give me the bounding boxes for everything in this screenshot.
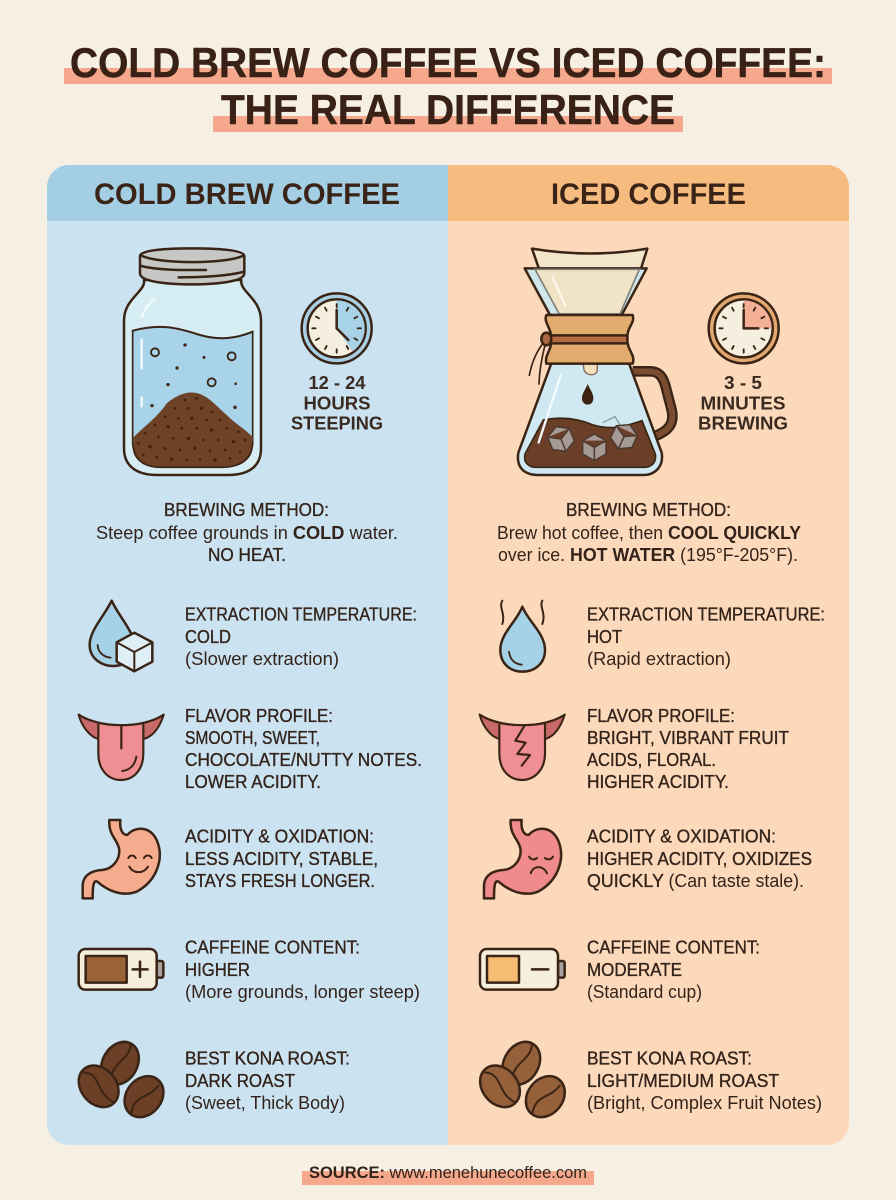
text: caffeine content: MODERATE — [587, 959, 682, 980]
text: caffeine content — [587, 936, 760, 1002]
text: caffeine content: HIGHER — [185, 959, 250, 980]
heading: cold brew coffee — [47, 165, 448, 221]
text: caffeine content: CAFFEINE CONTENT: — [185, 936, 360, 958]
text: best kona roast: BEST KONA ROAST: — [185, 1048, 350, 1068]
text: extraction temperature — [185, 604, 417, 669]
text: brewing method: Steep coffee grounds in COLD water. — [96, 522, 398, 543]
text: 12 to 24 hours steeping: 12 - 24 — [308, 372, 366, 393]
icon: clock 3 to 5 minutes — [709, 293, 779, 363]
text: extraction temperature — [587, 604, 825, 669]
text: 3 to 5 minutes brewing: 3 - 5 — [724, 372, 762, 393]
icon: hot water drop — [500, 601, 545, 672]
text: extraction temperature: EXTRACTION TEMPERATURE: — [185, 604, 417, 624]
text: best kona roast: LIGHT/MEDIUM ROAST — [587, 1070, 779, 1091]
text: extraction temperature: (Slower extraction) — [185, 648, 339, 669]
text: flavor profile: CHOCOLATE/NUTTY NOTES. — [185, 749, 422, 770]
icon: upset stomach — [484, 820, 561, 898]
text: flavor profile: SMOOTH, SWEET, — [185, 727, 320, 748]
text: best kona roast: BEST KONA ROAST: — [587, 1048, 752, 1068]
text: best kona roast — [185, 1048, 350, 1113]
text: flavor profile: FLAVOR PROFILE: — [587, 705, 735, 726]
text: flavor profile: BRIGHT, VIBRANT FRUIT — [587, 727, 789, 748]
icon: battery high — [79, 949, 163, 990]
icon: medium coffee beans — [472, 1035, 573, 1125]
icon: happy stomach — [83, 820, 160, 898]
title: THE REAL DIFFERENCE — [221, 86, 675, 133]
text: flavor profile: HIGHER ACIDITY. — [587, 771, 729, 792]
text: acidity and oxidation: ACIDITY & OXIDATION: — [185, 826, 374, 846]
source line: SOURCE: www.menehunecoffee.com — [309, 1164, 587, 1182]
text: 12 to 24 hours steeping — [291, 372, 383, 434]
text: brewing method: BREWING METHOD: — [164, 499, 329, 520]
text: extraction temperature: EXTRACTION TEMPERATURE: — [587, 604, 825, 624]
text: flavor profile — [587, 705, 789, 792]
heading: iced coffee: ICED COFFEE — [551, 178, 746, 211]
text: 3 to 5 minutes brewing: BREWING — [698, 412, 788, 434]
text: caffeine content: (Standard cup) — [587, 981, 702, 1002]
text: extraction temperature: COLD — [185, 626, 231, 647]
text: brewing method: NO HEAT. — [208, 544, 286, 565]
text: acidity and oxidation — [587, 826, 812, 891]
text: acidity and oxidation — [185, 826, 378, 891]
icon: clock 12 to 24 hours — [302, 293, 372, 363]
text: extraction temperature: HOT — [587, 626, 622, 647]
icon: dark coffee beans — [71, 1035, 171, 1125]
panel: iced coffee — [448, 165, 849, 1145]
text: acidity and oxidation: STAYS FRESH LONGER. — [185, 870, 375, 891]
text: brewing method — [497, 499, 802, 565]
text: brewing method: BREWING METHOD: — [566, 499, 731, 520]
icon: tongue with zigzag — [480, 715, 565, 780]
text: flavor profile — [185, 705, 422, 792]
text: brewing method: over ice. HOT WATER (195°F-205°F). — [498, 544, 798, 565]
title: COLD BREW COFFEE VS ICED COFFEE: — [70, 39, 826, 86]
panel: cold brew coffee — [47, 165, 448, 1145]
text: best kona roast — [587, 1048, 822, 1113]
text: flavor profile: LOWER ACIDITY. — [185, 771, 321, 792]
text: caffeine content — [185, 936, 420, 1002]
text: acidity and oxidation: LESS ACIDITY, STABLE, — [185, 848, 378, 869]
text: extraction temperature: (Rapid extraction) — [587, 648, 731, 669]
icon: tongue — [79, 715, 164, 780]
text: 3 to 5 minutes brewing: MINUTES — [700, 392, 786, 414]
text: 3 to 5 minutes brewing — [698, 372, 788, 434]
text: caffeine content: CAFFEINE CONTENT: — [587, 936, 760, 958]
icon: mason jar with coffee grounds — [124, 248, 261, 475]
text: acidity and oxidation: QUICKLY (Can taste stale). — [587, 870, 804, 891]
text: caffeine content: (More grounds, longer steep) — [185, 981, 420, 1002]
text: best kona roast: DARK ROAST — [185, 1070, 295, 1091]
text: acidity and oxidation: ACIDITY & OXIDATION: — [587, 826, 776, 846]
heading: iced coffee — [448, 165, 849, 221]
text: acidity and oxidation: HIGHER ACIDITY, OXIDIZES — [587, 848, 812, 869]
icon: battery low — [480, 949, 565, 990]
text: brewing method: Brew hot coffee, then COOL QUICKLY — [497, 522, 802, 543]
text: 12 to 24 hours steeping: STEEPING — [291, 412, 383, 434]
text: flavor profile: FLAVOR PROFILE: — [185, 705, 333, 726]
text: flavor profile: ACIDS, FLORAL. — [587, 749, 716, 770]
text: brewing method — [96, 499, 398, 565]
text: best kona roast: (Sweet, Thick Body) — [185, 1092, 345, 1113]
icon: pour-over carafe with ice — [518, 249, 672, 475]
text: 12 to 24 hours steeping: HOURS — [304, 392, 370, 414]
title — [64, 39, 832, 133]
text: best kona roast: (Bright, Complex Fruit Notes) — [587, 1092, 822, 1113]
icon: water drop with ice cube — [90, 601, 152, 671]
heading: cold brew coffee: COLD BREW COFFEE — [94, 178, 400, 211]
